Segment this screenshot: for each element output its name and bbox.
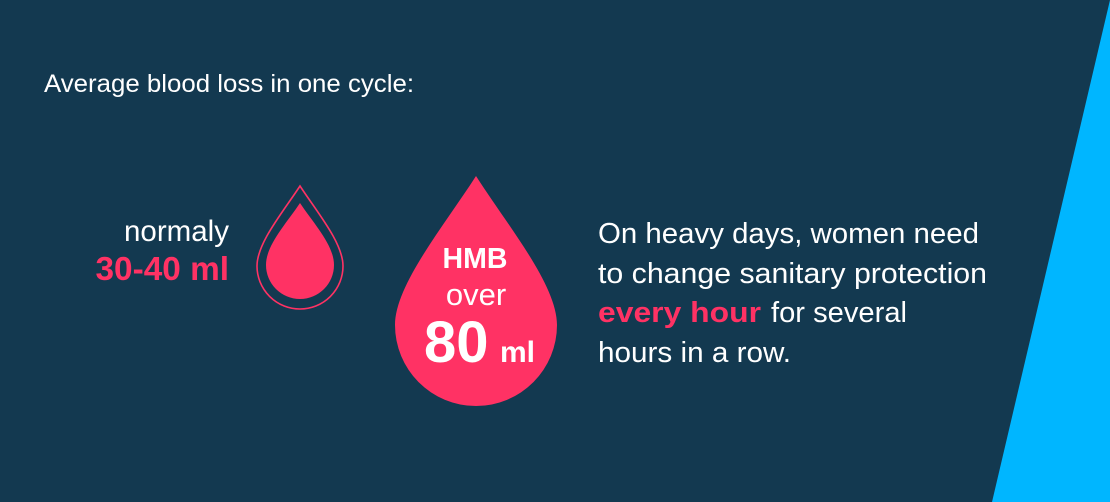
icon: large blood drop with HMB text: 80 (424, 310, 489, 375)
paragraph: heavy days: for several (771, 297, 907, 329)
icon: large blood drop with HMB text: ml (500, 336, 535, 369)
paragraph: heavy days: to change sanitary protection (598, 258, 987, 290)
normal blood loss label: 30-40 ml (96, 250, 229, 287)
paragraph: heavy days: every hour (598, 297, 761, 329)
normal blood loss label (96, 215, 229, 287)
icon: large blood drop with HMB text (395, 176, 557, 406)
icon: large blood drop with HMB text: HMB (443, 243, 507, 275)
icon: small outlined blood drop (257, 186, 343, 309)
icon: large blood drop with HMB text: over (446, 277, 506, 312)
paragraph: heavy days: hours in a row. (598, 337, 791, 369)
blue diagonal corner shape (992, 0, 1110, 502)
heading: Average blood loss in one cycle: (44, 70, 414, 98)
paragraph: heavy days: On heavy days, women need (598, 218, 979, 250)
normal blood loss label: normaly (124, 215, 229, 248)
paragraph: heavy days (598, 218, 987, 369)
